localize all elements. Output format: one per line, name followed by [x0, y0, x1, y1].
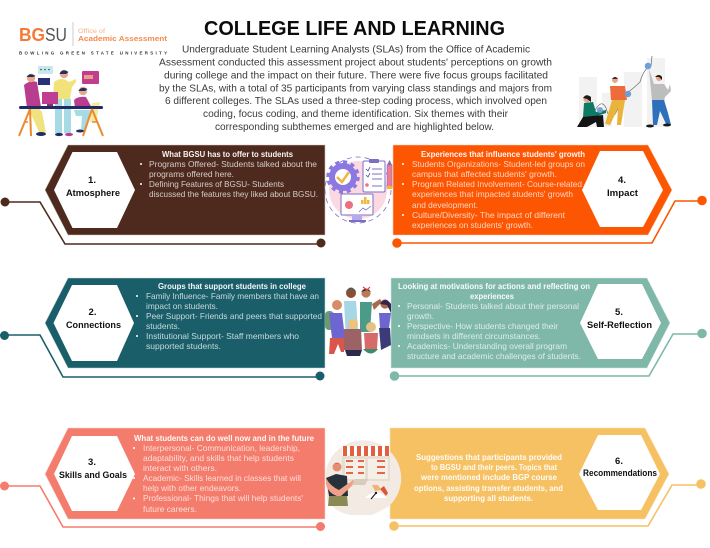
panel text	[414, 452, 563, 503]
logo: BGSU Office of Academic Assessment: SU	[45, 24, 67, 45]
hexagon label	[582, 151, 663, 227]
hexagon label: Impact	[607, 188, 639, 199]
panel 2: Connections	[0, 278, 325, 380]
title: COLLEGE LIFE AND LEARNING	[204, 18, 505, 40]
logo: BGSU Office of Academic Assessment	[19, 22, 168, 56]
panel text	[398, 281, 590, 361]
connector line	[389, 479, 706, 531]
panel text: impact on students.	[146, 301, 218, 311]
panel text: supported students.	[146, 341, 221, 351]
logo: BGSU Office of Academic Assessment: Academic Assessment	[78, 36, 168, 43]
panel text	[402, 149, 585, 230]
hexagon label: Connections	[66, 320, 121, 331]
panel text: Suggestions that participants provided	[416, 452, 562, 462]
panel text: What BGSU has to offer to students	[162, 149, 293, 159]
hexagon label: 6.	[615, 456, 623, 467]
hexagon label	[54, 285, 134, 361]
panel text: Culture/Diversity- The impact of different	[412, 210, 566, 220]
panel text: Peer Support- Friends and peers that supported	[146, 311, 322, 321]
hexagon label: 5.	[615, 307, 623, 318]
panel text: mindsets in different circumstances.	[407, 331, 541, 341]
panel text: Program Related Involvement- Course-related	[412, 179, 582, 189]
intro paragraph: 6 different colleges. The SLAs used a three-step coding process, which involved open	[165, 96, 547, 107]
panel text	[140, 149, 318, 199]
panel background	[393, 145, 672, 235]
panel text: students.	[146, 321, 180, 331]
panel text: were mentioned include BGP course	[420, 472, 557, 482]
panel text: adaptability, and skills that help students	[143, 453, 294, 463]
panel text: Groups that support students in college	[158, 281, 306, 291]
connector line	[0, 331, 324, 380]
panel 3: Skills and Goals	[0, 428, 325, 531]
panel text: campus that affected students' growth.	[412, 169, 557, 179]
panel text	[136, 281, 322, 351]
hexagon label: Self-Reflection	[587, 320, 652, 331]
panel text: Professional- Things that will help students'	[143, 493, 303, 503]
panel text: Academic- Skills learned in classes that will	[143, 473, 301, 483]
panel background	[45, 145, 325, 235]
intro paragraph: coding, focus coding, and theme identification. Six themes with their	[203, 109, 509, 120]
panel text: experiences	[470, 291, 514, 301]
panel background	[390, 428, 669, 519]
panel text: Programs Offered- Students talked about the	[149, 159, 317, 169]
panel text: Institutional Support- Staff members who	[146, 331, 299, 341]
illustration: group of students	[325, 287, 391, 356]
panel text: experiences on students' growth.	[412, 220, 533, 230]
logo: BGSU Office of Academic Assessment: BOWLING GREEN STATE UNIVERSITY	[19, 50, 167, 56]
panel text: Family Influence- Family members that have an	[146, 291, 319, 301]
panel text: experiences that impacted students' growth	[412, 189, 573, 199]
panel 4: Impact	[392, 145, 707, 248]
hexagon label	[579, 435, 660, 510]
panel text: Students Organizations- Student-led groups on	[412, 159, 585, 169]
illustration: team working at a table	[19, 66, 103, 136]
hexagon label: Skills and Goals	[59, 470, 127, 481]
connector line	[390, 329, 707, 381]
panel text: and development.	[412, 200, 478, 210]
logo: BGSU Office of Academic Assessment: BG	[19, 24, 45, 45]
connector line	[0, 198, 326, 248]
hexagon label: 2.	[89, 307, 96, 318]
panel text: Perspective- How students changed their	[407, 321, 558, 331]
panel text: to BGSU and their peers. Topics that	[431, 462, 557, 472]
panel background	[45, 428, 325, 519]
panel text: programs offered here.	[149, 169, 234, 179]
hexagon label: Atmosphere	[66, 188, 120, 199]
hexagon label: 4.	[618, 175, 626, 186]
icon: gear, checklist and monitor	[325, 157, 392, 223]
panel text: supporting all students.	[444, 493, 533, 503]
panel 6: Recommendations	[389, 428, 706, 531]
connector line	[0, 482, 325, 531]
panel text: Interpersonal- Communication, leadership,	[143, 443, 300, 453]
panel text: discussed the features they liked about BGSU.	[149, 189, 318, 199]
panel text: options, assisting transfer students, and	[414, 483, 563, 493]
intro paragraph	[159, 44, 552, 133]
intro paragraph: by the SLAs, with a total of 35 participants from varying class standings and majors from	[159, 84, 552, 94]
panel text: structure and academic challenges of students.	[407, 351, 581, 361]
panel background	[45, 278, 325, 368]
intro paragraph: Assessment conducted this assessment project about students' perceptions on growth	[159, 58, 552, 68]
connector line	[392, 196, 707, 248]
panel text: Defining Features of BGSU- Students	[149, 179, 284, 189]
illustration: people pulling a rising line over bar chart	[577, 56, 671, 128]
intro paragraph: corresponding subthemes emerged and are highlighted below.	[215, 122, 494, 133]
panel 5: Self-Reflection	[390, 278, 707, 381]
hexagon label	[54, 436, 135, 511]
illustration: woman reviewing board and gauge	[325, 440, 401, 515]
panel text: help with other endeavors.	[143, 483, 241, 493]
hexagon label	[580, 284, 661, 359]
panel 1: Atmosphere	[0, 145, 326, 248]
panel text: What students can do well now and in the future	[134, 433, 314, 443]
panel text	[133, 433, 314, 514]
logo: BGSU Office of Academic Assessment: Office of	[78, 28, 105, 35]
hexagon label: 1.	[88, 175, 96, 186]
panel text: future careers.	[143, 504, 197, 514]
hexagon label: 3.	[88, 457, 96, 468]
hexagon label	[54, 152, 135, 228]
hexagon label: Recommendations	[583, 468, 657, 479]
panel text: Personal- Students talked about their personal	[407, 301, 579, 311]
panel text: Experiences that influence students' growth	[421, 149, 585, 159]
intro paragraph: during college and the impact on their future. There were five focus groups facilitated	[164, 70, 548, 82]
panel text: Looking at motivations for actions and reflecting on	[398, 281, 590, 291]
panel background	[391, 278, 670, 368]
panel text: interact with others.	[143, 463, 217, 473]
panel text: growth.	[407, 311, 434, 321]
panel text: Academics- Understanding overall program	[407, 341, 567, 351]
intro paragraph: Undergraduate Student Learning Analysts (SLAs) from the Office of Academic	[182, 44, 530, 56]
